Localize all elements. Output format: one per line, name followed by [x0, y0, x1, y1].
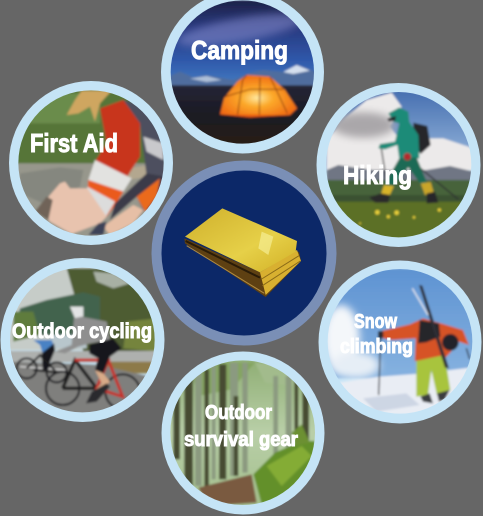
label: Outdoor cycling: Outdoor cycling — [12, 320, 152, 343]
circle: Outdoor survival gear — [162, 352, 324, 514]
label: Hiking: Hiking — [343, 160, 412, 190]
label: Outdoor survival gear, two lines: Outdoor — [205, 402, 272, 424]
label: Snow climbing, two lines — [340, 311, 413, 358]
circle: centre product, emergency blanket — [152, 160, 336, 346]
circle: Hiking — [316, 83, 480, 247]
label: First Aid: First Aid — [30, 128, 118, 158]
circle: Outdoor cycling — [0, 258, 164, 422]
photo: misty forest path — [168, 359, 318, 506]
label: Outdoor survival gear, two lines: survival gear — [184, 429, 298, 451]
photo: first aid responder — [17, 88, 167, 240]
photo: climber on snow — [323, 268, 475, 415]
label: Snow climbing, two lines: climbing — [340, 336, 413, 358]
circle: Snow climbing — [318, 260, 482, 424]
photo: road cyclists — [8, 267, 157, 415]
label: Snow climbing, two lines: Snow — [354, 311, 397, 333]
icon: folded gold foil blanket — [184, 208, 301, 297]
photo: tent under night sky — [167, 0, 320, 149]
circle: First Aid — [9, 81, 173, 245]
label: Outdoor survival gear, two lines — [184, 402, 298, 451]
circle: Camping — [161, 0, 324, 154]
label: Camping: Camping — [191, 35, 288, 65]
photo: hiker in meadow — [323, 90, 473, 242]
